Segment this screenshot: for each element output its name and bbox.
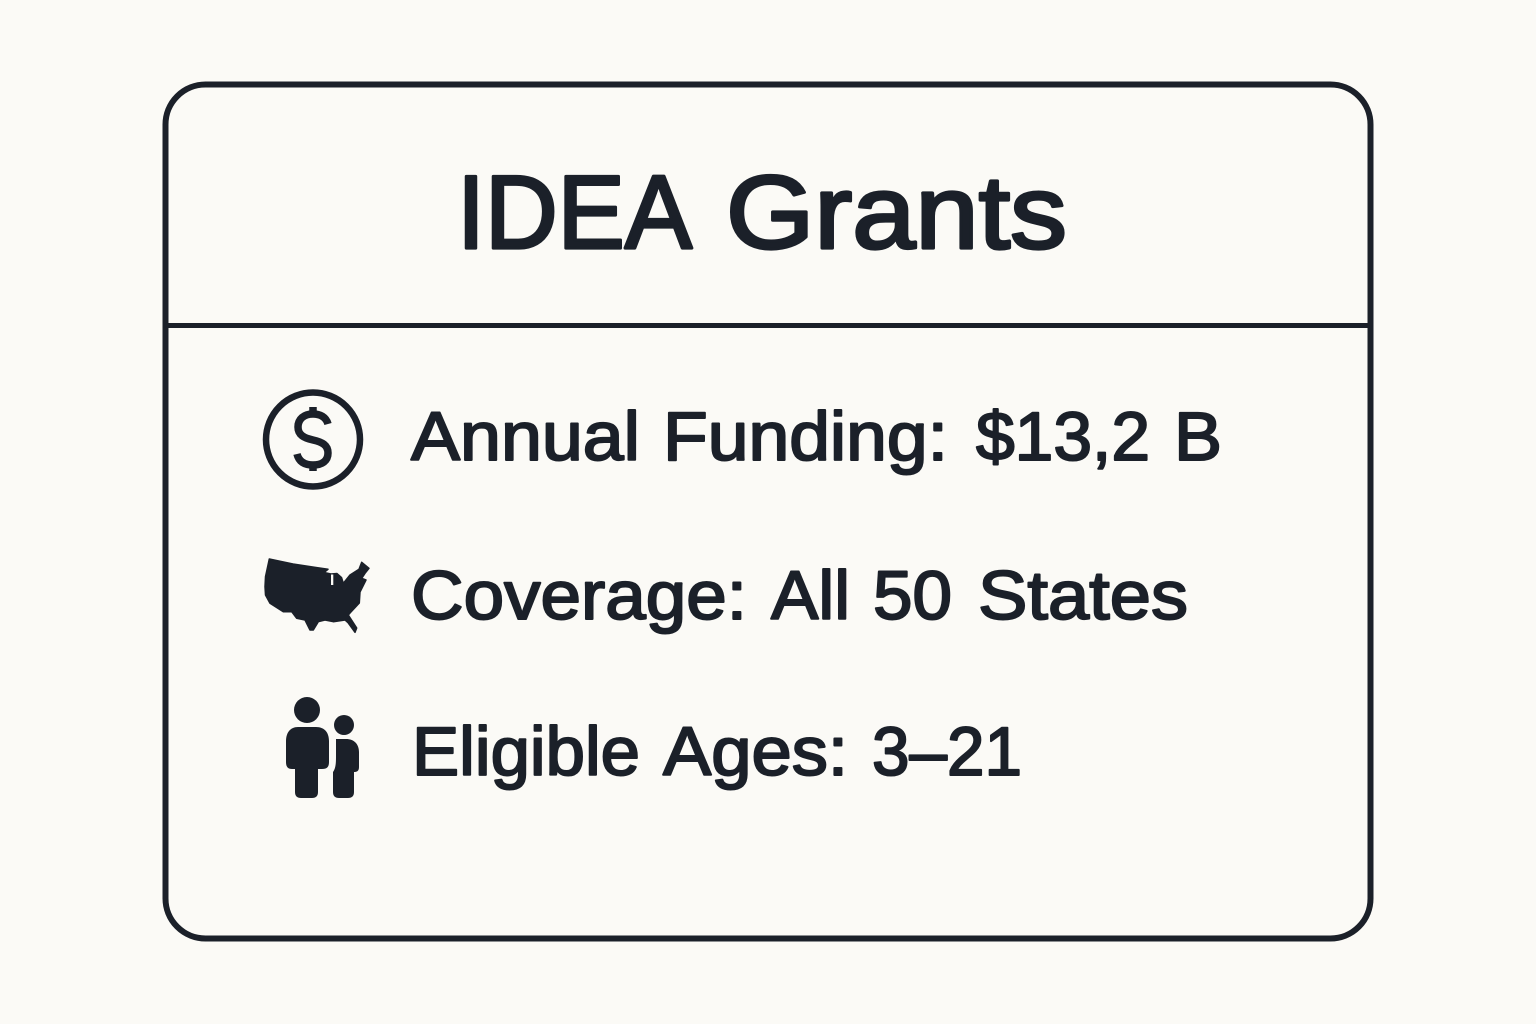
row: annual funding (266, 392, 1222, 486)
icon: dollar coin (266, 392, 360, 486)
icon: USA map (265, 559, 369, 632)
label: eligible ages: Ages: (663, 713, 848, 790)
label: annual funding (411, 398, 1222, 475)
label: eligible ages: 3–21 (872, 713, 1022, 790)
label: coverage: All (771, 557, 850, 634)
title (457, 155, 1067, 271)
title: Grants (726, 155, 1067, 271)
label: coverage (411, 557, 1188, 634)
title: IDEA (457, 155, 693, 271)
panel: IDEA Grants card (166, 84, 1370, 938)
icon: adult and child (286, 697, 359, 798)
label: annual funding: Funding: (663, 398, 948, 475)
label: annual funding: B (1174, 398, 1222, 475)
row: eligible ages (286, 697, 1022, 798)
label: coverage: 50 (873, 557, 952, 634)
label: annual funding: $13,2 (976, 398, 1150, 475)
label: coverage: States (978, 557, 1188, 634)
label: coverage: Coverage: (411, 557, 747, 634)
row: coverage (265, 557, 1188, 634)
label: eligible ages (412, 713, 1022, 790)
label: eligible ages: Eligible (412, 713, 640, 790)
label: annual funding: Annual (411, 398, 640, 475)
